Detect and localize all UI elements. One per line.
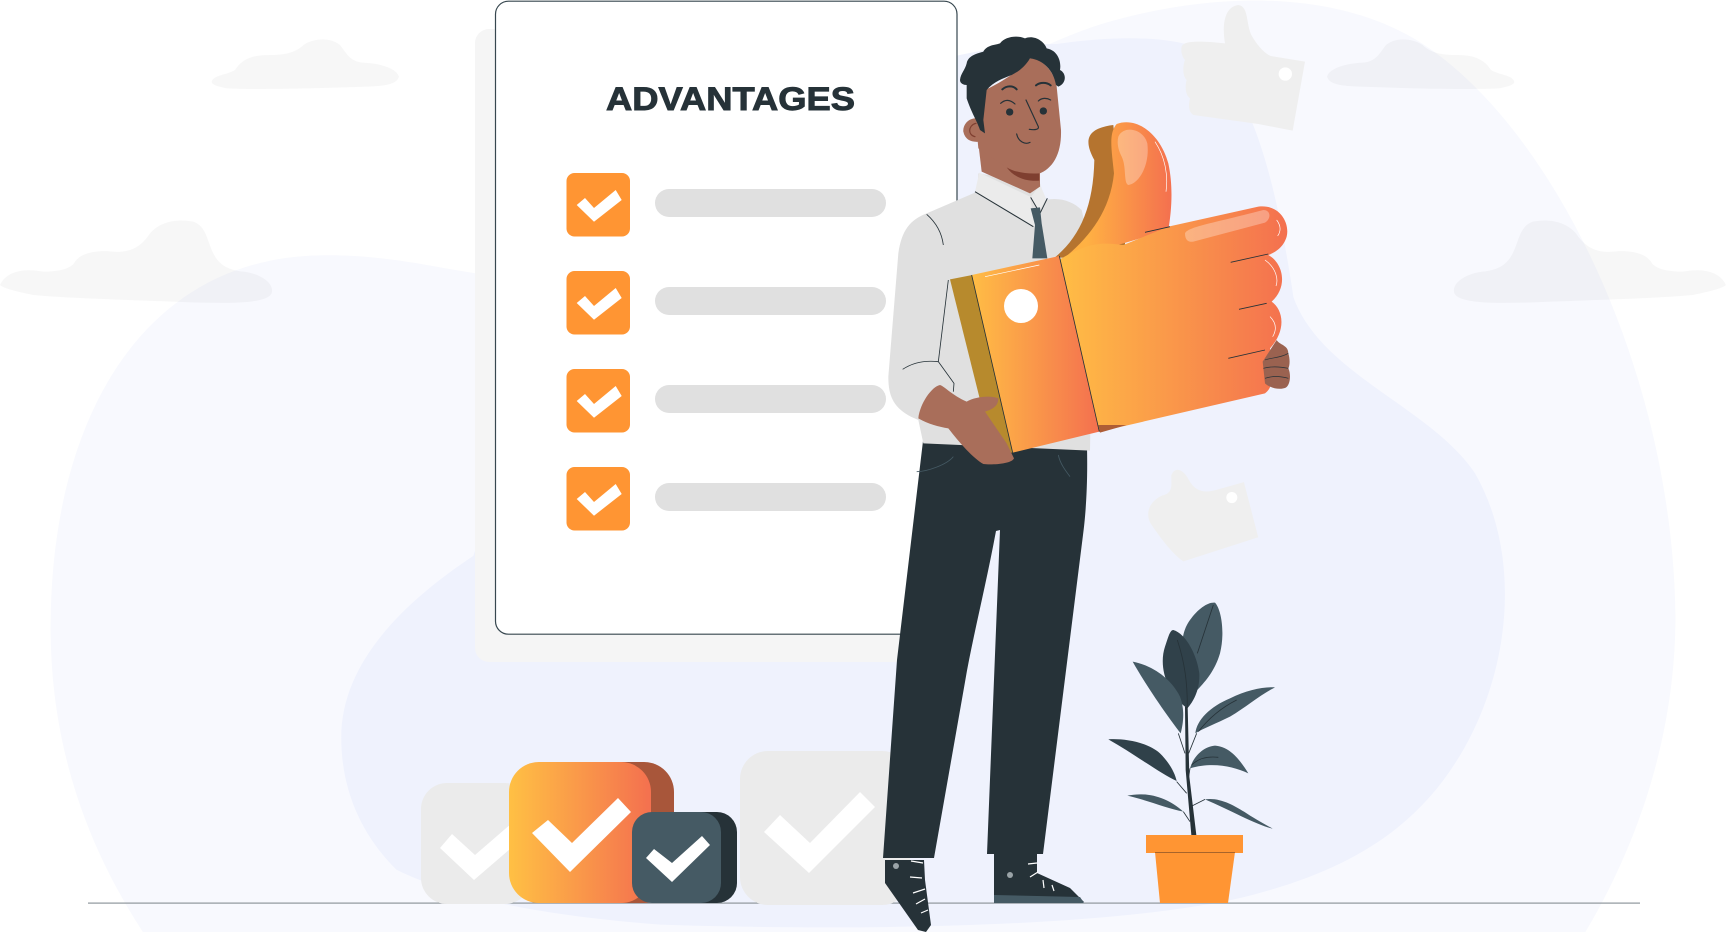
man: right hand fingers	[1263, 340, 1290, 389]
checklist row 2	[566, 271, 886, 334]
man: facial features	[970, 83, 1051, 143]
man: orange thumb	[1062, 122, 1171, 260]
card	[496, 1, 957, 634]
gray thumbs up: lower	[1148, 470, 1258, 561]
orange check box	[509, 762, 674, 903]
plant leaves	[1108, 603, 1275, 835]
man	[883, 37, 1290, 932]
plant	[1108, 603, 1275, 903]
man: shirt	[888, 173, 1093, 451]
plant pot	[1146, 835, 1243, 903]
man: tie	[1031, 207, 1047, 258]
man: eyes	[1006, 107, 1047, 116]
title: ADVANTAGES	[606, 81, 855, 117]
gray thumbs up: upper	[1181, 5, 1305, 131]
man: neck	[978, 143, 1040, 193]
man: ear	[963, 118, 980, 142]
man: hand lines	[972, 142, 1280, 453]
checklist row 4	[566, 467, 886, 530]
gray check box left	[421, 783, 531, 904]
man: cuff button	[1004, 289, 1038, 323]
dark check box	[632, 812, 737, 903]
man: left hand	[918, 385, 1014, 464]
gray check box right	[740, 751, 910, 905]
man: back of thumb	[1055, 125, 1127, 260]
man: collar	[975, 173, 1047, 227]
checklist row 1	[566, 173, 886, 236]
clouds: left	[0, 39, 399, 303]
man: chin shadow	[1007, 167, 1039, 181]
man: left shoe	[885, 860, 931, 932]
man: hair	[960, 37, 1065, 133]
ground line	[88, 902, 1640, 904]
man: cuff	[972, 256, 1099, 453]
man: trouser folds	[917, 455, 1070, 477]
card shadow	[475, 29, 915, 662]
man: face	[977, 58, 1061, 175]
clouds: right	[1327, 39, 1726, 303]
man: cuff side	[950, 275, 1013, 453]
man: shirt folds	[903, 214, 954, 392]
man: orange hand	[1060, 206, 1287, 432]
man: pants	[883, 441, 1087, 858]
man: head	[960, 37, 1065, 193]
man: right shoe	[994, 854, 1084, 903]
man: cuff inner	[1098, 425, 1127, 433]
background blob: darker	[341, 38, 1505, 927]
checklist row 3	[566, 369, 886, 432]
man: hand highlights	[1118, 130, 1269, 242]
